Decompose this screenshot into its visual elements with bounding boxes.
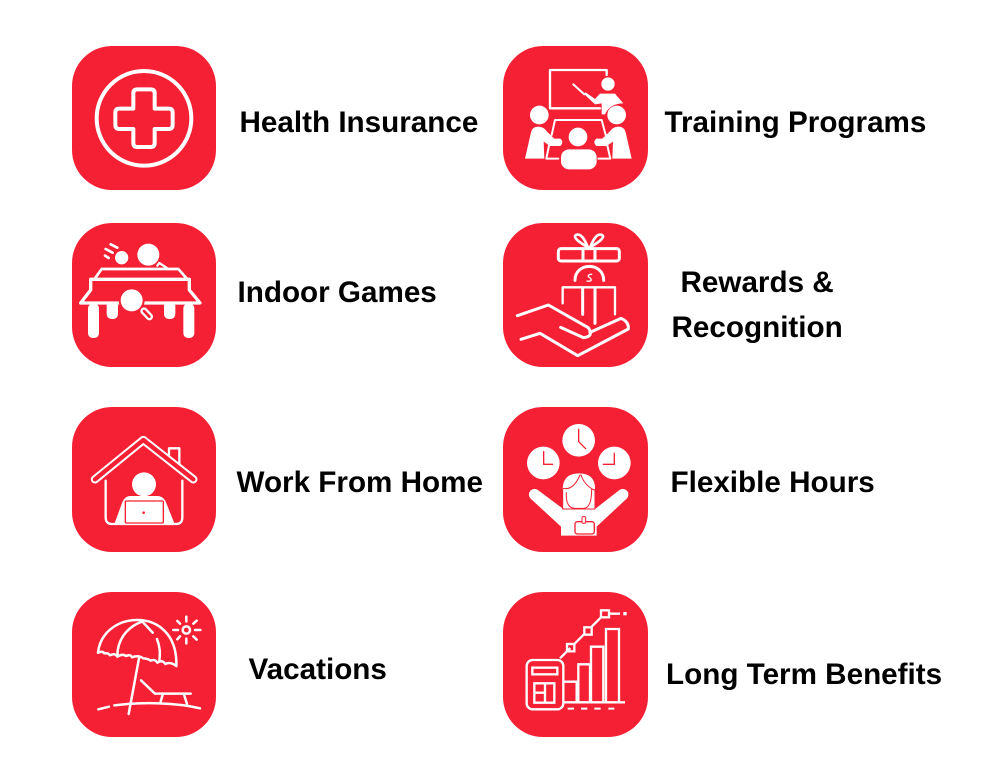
- tile: flexible hours: [503, 407, 648, 552]
- icon: beach umbrella and lounger: [98, 617, 200, 714]
- icon: calculator and growth chart: [527, 610, 627, 709]
- item: rewards and recognition: [503, 223, 843, 367]
- label: indoor games: Indoor Games: [238, 276, 437, 309]
- item: work from home: [72, 407, 483, 552]
- label: long term benefits: Long Term Benefits: [666, 658, 942, 691]
- tile: training programs: [503, 46, 648, 190]
- item: flexible hours: [503, 407, 875, 552]
- label: rewards and recognition: Rewards &: [680, 266, 834, 299]
- item: health insurance: [72, 46, 478, 190]
- label: rewards and recognition: Recognition: [672, 311, 843, 344]
- label: health insurance: Health Insurance: [240, 106, 478, 139]
- item: vacations: [72, 592, 387, 737]
- tile: health insurance: [72, 46, 216, 190]
- tile: indoor games: [72, 223, 216, 367]
- item: indoor games: [72, 223, 437, 367]
- label: flexible hours: Flexible Hours: [670, 466, 875, 499]
- item: long term benefits: [503, 592, 942, 737]
- tile: rewards and recognition: [503, 223, 648, 367]
- icon: person working at home: [95, 440, 193, 524]
- tile: long term benefits: [503, 592, 648, 737]
- item: training programs: [503, 46, 926, 190]
- icon: table tennis: [81, 244, 200, 338]
- icon: hand holding gift: [517, 235, 628, 356]
- icon: training room: [525, 70, 632, 169]
- label: work from home: Work From Home: [236, 466, 483, 499]
- label: rewards and recognition: [672, 266, 843, 344]
- tile: work from home: [72, 407, 216, 552]
- label: training programs: Training Programs: [664, 106, 926, 139]
- tile: vacations: [72, 592, 216, 737]
- label: vacations: Vacations: [248, 653, 387, 686]
- icon: medical cross in circle: [97, 71, 191, 166]
- icon: person with clocks: [527, 424, 631, 536]
